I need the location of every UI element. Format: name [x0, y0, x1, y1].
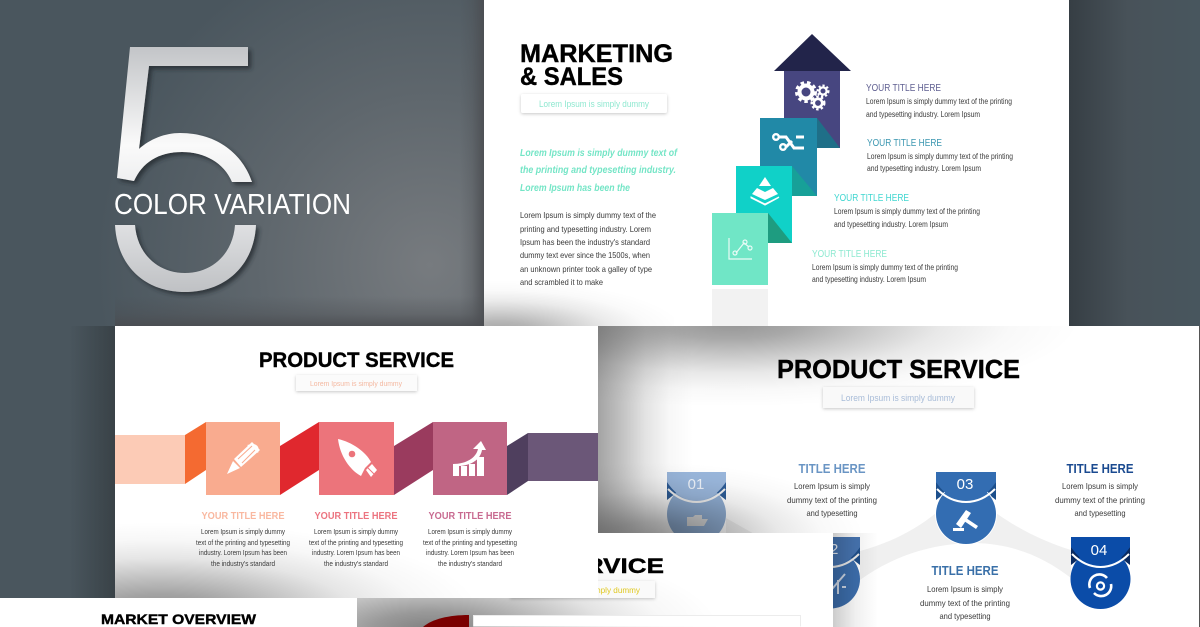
- text block: column 1: text of the printing and typesetting: [196, 538, 290, 547]
- text block: title 2: TITLE HERE: [1066, 461, 1134, 476]
- icon: growth chart: [453, 441, 486, 476]
- text block: step 4: and typesetting industry. Lorem Ipsum: [812, 275, 926, 284]
- subtitle pill: [510, 581, 655, 598]
- text block: title 3: dummy text of the printing: [920, 598, 1010, 608]
- text block: step 1: YOUR TITLE HERE: [866, 82, 941, 94]
- body text: an unknown printer took a galley of type: [520, 264, 652, 274]
- big numeral 5: [115, 47, 256, 292]
- subtitle pill: [823, 387, 974, 408]
- text block: step 2: Lorem Ipsum is simply dummy text of the printing: [867, 152, 1013, 161]
- heading: color variation: COLOR VARIATION: [114, 189, 351, 221]
- heading: marketing and sales: & SALES: [520, 63, 623, 91]
- text block: title 1: TITLE HERE: [798, 461, 866, 476]
- heading: market overview: MARKET OVERVIEW: [101, 611, 257, 627]
- icon: pencil: [227, 442, 260, 474]
- connector band: [726, 513, 1071, 580]
- icon: cycle arrows: [1089, 574, 1111, 596]
- body text: and scrambled it to make: [520, 277, 603, 287]
- text block: title 3: and typesetting: [940, 611, 991, 621]
- text block: title 3: TITLE HERE: [932, 563, 999, 578]
- text block: step 2: [867, 137, 1013, 173]
- heading: product service: PRODUCT SERVICE: [777, 354, 1020, 384]
- subtitle pill: Lorem Ipsum is simply dummy: [530, 585, 641, 595]
- badge 02: 02: [822, 541, 838, 558]
- italic intro text: the printing and typesetting industry.: [520, 164, 676, 176]
- text block: step 1: and typesetting industry. Lorem Ipsum: [866, 110, 980, 119]
- subtitle pill: [521, 94, 667, 113]
- icon: routes: [773, 134, 804, 150]
- ribbon chart: [115, 422, 598, 495]
- italic intro text: Lorem Ipsum is simply dummy text of: [520, 147, 678, 159]
- body text: dummy text ever since the 1500s, when: [520, 250, 650, 260]
- text block: step 3: YOUR TITLE HERE: [834, 192, 909, 204]
- text block: title 1: dummy text of the printing: [787, 495, 877, 505]
- icon: scissors: [826, 574, 846, 596]
- text block: title 2: [1055, 461, 1145, 518]
- text block: step 3: [834, 192, 980, 229]
- badge 03: 03: [957, 476, 973, 493]
- text block: column 2: industry. Lorem Ipsum has been: [312, 548, 400, 557]
- text block: column 2: text of the printing and typesetting: [309, 538, 403, 547]
- text block: column 2: [309, 510, 403, 568]
- icon: gavel: [953, 510, 978, 531]
- text block: step 4: YOUR TITLE HERE: [812, 248, 887, 260]
- text block: column 3: text of the printing and typesetting: [423, 538, 517, 547]
- badge 01: 01: [688, 476, 704, 493]
- text block: column 1: [196, 510, 290, 568]
- panel: red product service slide: [357, 533, 833, 627]
- text block: step 3: and typesetting industry. Lorem Ipsum: [834, 220, 948, 229]
- badge 03: [935, 472, 997, 545]
- icon: rocket: [338, 439, 377, 477]
- heading: marketing and sales: MARKETING: [520, 40, 673, 68]
- text block: title 3: [920, 563, 1010, 621]
- badge 01: [667, 472, 726, 544]
- pie chart fragment: [423, 615, 469, 627]
- text block: title 1: Lorem Ipsum is simply: [794, 481, 871, 491]
- badge 04: [1070, 537, 1130, 609]
- text block: title 2: Lorem Ipsum is simply: [1062, 481, 1139, 491]
- panel: market overview slide: [0, 598, 357, 627]
- italic intro text: Lorem Ipsum has been the: [520, 182, 630, 194]
- text block: column 1: YOUR TITLE HERE: [202, 510, 284, 522]
- text block: column 2: YOUR TITLE HERE: [314, 510, 398, 522]
- heading: marketing and sales: [520, 40, 673, 91]
- subtitle pill: Lorem Ipsum is simply dummy: [310, 379, 402, 388]
- panel: warm product service slide: [115, 326, 598, 598]
- subtitle pill: [296, 375, 417, 391]
- panel: marketing and sales slide: [484, 0, 1069, 326]
- body text: Ipsum has been the industry's standard: [520, 237, 650, 247]
- badge 04: 04: [1091, 542, 1107, 559]
- text block: step 1: [866, 82, 1012, 119]
- text block: column 3: [423, 510, 517, 568]
- body text: [520, 210, 656, 287]
- text block: step 4: Lorem Ipsum is simply dummy text of the printing: [812, 263, 958, 272]
- text block: column 1: industry. Lorem Ipsum has been: [199, 548, 287, 557]
- text block: column 1: Lorem Ipsum is simply dummy: [201, 527, 285, 536]
- text block: step 4: [812, 248, 958, 284]
- slide shading: [598, 326, 1080, 627]
- subtitle pill: Lorem Ipsum is simply dummy: [539, 99, 649, 109]
- text block: column 3: YOUR TITLE HERE: [428, 510, 512, 522]
- icon: pyramid: [751, 177, 779, 205]
- icon: gears: [796, 82, 828, 109]
- text block: title 1: [787, 461, 877, 518]
- content box: [474, 616, 800, 626]
- text block: column 3: the industry's standard: [438, 559, 502, 568]
- body text: Lorem Ipsum is simply dummy text of the: [520, 210, 656, 220]
- text block: title 1: and typesetting: [806, 508, 858, 518]
- text block: column 2: Lorem Ipsum is simply dummy: [314, 527, 398, 536]
- text block: step 1: Lorem Ipsum is simply dummy text of the printing: [866, 97, 1012, 106]
- text block: title 3: Lorem Ipsum is simply: [927, 584, 1004, 594]
- heading: product service: PRODUCT SERVICE: [259, 349, 454, 372]
- body text: printing and typesetting industry. Lorem: [520, 224, 651, 234]
- subtitle pill: Lorem Ipsum is simply dummy: [841, 393, 955, 404]
- icon: folder: [687, 515, 708, 526]
- text block: column 3: Lorem Ipsum is simply dummy: [428, 527, 512, 536]
- text block: step 2: and typesetting industry. Lorem Ipsum: [867, 164, 981, 173]
- text block: title 2: dummy text of the printing: [1055, 495, 1145, 505]
- stair arrow chart: [712, 34, 851, 326]
- text block: step 3: Lorem Ipsum is simply dummy text of the printing: [834, 207, 980, 216]
- heading: product service: PRODUCT SERVICE: [414, 555, 664, 578]
- text block: title 2: and typesetting: [1074, 508, 1126, 518]
- panel: product service slide, blue: [598, 326, 1200, 627]
- badge 02: [801, 537, 860, 608]
- text block: column 3: industry. Lorem Ipsum has been: [426, 548, 514, 557]
- italic intro text: [520, 147, 678, 194]
- text block: column 2: the industry's standard: [324, 559, 388, 568]
- text block: column 1: the industry's standard: [211, 559, 275, 568]
- icon: line chart: [729, 238, 752, 259]
- text block: step 2: YOUR TITLE HERE: [867, 137, 942, 149]
